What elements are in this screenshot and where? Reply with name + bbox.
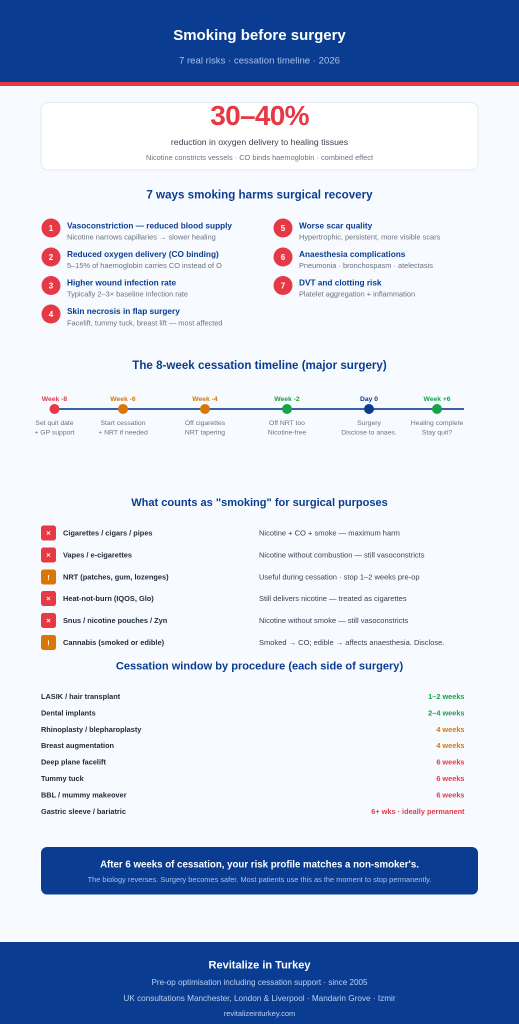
milestone week -2 (268, 396, 306, 436)
milestone week -8: Set quit date (35, 420, 74, 427)
row: BBL (41, 790, 464, 800)
row: LASIK: LASIK / hair transplant (41, 692, 121, 701)
row: cannabis: ! (47, 638, 50, 648)
stat card (41, 100, 478, 170)
row: NRT: Useful during cessation · stop 1–2 weeks pre-op (259, 572, 420, 582)
risk 2 (42, 248, 222, 270)
risk 4: Skin necrosis in flap surgery (67, 307, 180, 316)
row: snus: × (46, 616, 51, 625)
row: tummy tuck (41, 774, 464, 783)
risk 7 (274, 276, 415, 298)
milestone week -4: Off cigarettes (185, 420, 226, 427)
milestone day 0 (341, 396, 397, 436)
row: gastric: 6+ wks · ideally permanent (371, 807, 465, 816)
risk 6: 6 (281, 253, 286, 262)
heading: 7 ways: 7 ways smoking harms surgical recovery (146, 188, 373, 202)
milestone day 0: Day 0 (360, 396, 378, 403)
milestone week +6: Week +6 (423, 396, 451, 403)
milestone week -4: Week -4 (192, 396, 218, 403)
footer line 2: UK consultations Manchester, London & Liverpool · Mandarin Grove · Izmir (123, 994, 396, 1003)
row: heat-not-burn: × (46, 594, 51, 603)
risk 3: Higher wound infection rate (67, 278, 176, 288)
callout banner (41, 847, 478, 894)
timeline chart (34, 396, 464, 436)
milestone day 0: Surgery (357, 420, 381, 427)
risk 4 (42, 304, 223, 328)
row: rhinoplasty: Rhinoplasty / blepharoplasty (41, 725, 142, 734)
row: cannabis (41, 635, 444, 650)
stat note: Nicotine constricts vessels · CO binds haemoglobin · combined effect (146, 153, 373, 162)
heading: cessation window: Cessation window by procedure (each side of surgery) (116, 660, 403, 672)
risk 7: Platelet aggregation + inflammation (299, 290, 415, 298)
row: snus (41, 613, 408, 628)
risk 5 (274, 218, 441, 242)
risk 6: Pneumonia · bronchospasm · atelectasis (299, 261, 433, 270)
title: Smoking before surgery (173, 27, 346, 44)
risk 5: Hypertrophic, persistent, more visible scars (299, 232, 441, 242)
risk 7: 7 (281, 282, 286, 290)
milestone week +6: Stay quit? (422, 430, 452, 436)
milestone week -6: Week -6 (110, 396, 136, 403)
row: vapes: Vapes / e-cigarettes (63, 550, 132, 560)
risk 3 (42, 276, 188, 298)
row: facelift: Deep plane facelift (41, 758, 106, 766)
risk 7: DVT and clotting risk (299, 278, 382, 288)
footer (0, 942, 519, 1024)
risk 3: Typically 2–3× baseline infection rate (67, 290, 188, 298)
row: rhinoplasty (41, 725, 464, 734)
row: gastric (41, 807, 465, 816)
milestone week -6 (98, 396, 148, 436)
row: cigarettes: Nicotine + CO + smoke — maximum harm (259, 528, 400, 538)
milestone week -4 (185, 396, 226, 436)
risk 6 (274, 248, 433, 270)
row: NRT: ! (47, 573, 50, 582)
callout text: The biology reverses. Surgery becomes safer. Most patients use this as the moment to stop permanently. (88, 875, 431, 884)
row: LASIK: 1–2 weeks (428, 692, 464, 701)
row: snus: Nicotine without smoke — still vasoconstricts (259, 616, 408, 625)
row: heat-not-burn (41, 591, 407, 606)
row: dental: 2–4 weeks (428, 708, 464, 718)
heading: what counts: What counts as "smoking" for surgical purposes (131, 497, 388, 509)
milestone week -2: Week -2 (274, 396, 300, 403)
row: breast: 4 weeks (436, 741, 464, 750)
row: tummy tuck: Tummy tuck (41, 774, 85, 783)
stat description: reduction in oxygen delivery to healing tissues (171, 137, 349, 147)
footer brand: Revitalize in Turkey (209, 960, 311, 972)
row: NRT (41, 570, 420, 584)
row: NRT: NRT (patches, gum, lozenges) (63, 572, 169, 582)
milestone week -6: + NRT if needed (98, 430, 148, 436)
risk 4: Facelift, tummy tuck, breast lift — most affected (67, 318, 223, 328)
row: BBL: BBL / mummy makeover (41, 790, 127, 800)
risk 6: Anaesthesia complications (299, 250, 406, 259)
risk 3: 3 (49, 282, 54, 290)
row: heat-not-burn: Still delivers nicotine — treated as cigarettes (259, 594, 407, 603)
row: BBL: 6 weeks (436, 790, 464, 800)
row: breast (41, 741, 464, 750)
row: facelift: 6 weeks (436, 758, 464, 766)
row: cannabis: Smoked → CO; edible → affects anaesthesia. Disclose. (259, 638, 444, 647)
row: cannabis: Cannabis (smoked or edible) (63, 638, 165, 647)
milestone week +6 (411, 396, 463, 436)
milestone week -4: NRT tapering (185, 430, 225, 436)
milestone week -2: Off NRT too (269, 420, 305, 427)
smoking products table (41, 526, 444, 650)
row: tummy tuck: 6 weeks (436, 774, 464, 783)
row: cigarettes: Cigarettes / cigars / pipes (63, 528, 153, 538)
risk 1: 1 (49, 224, 54, 233)
footer url: revitalizeinturkey.com (224, 1009, 295, 1018)
row: heat-not-burn: Heat-not-burn (IQOS, Glo) (63, 594, 154, 603)
risk 4: 4 (49, 310, 54, 319)
risk 2: Reduced oxygen delivery (CO binding) (67, 250, 219, 259)
milestone day 0: Disclose to anaes. (341, 430, 397, 436)
risk 1 (42, 218, 232, 242)
row: snus: Snus / nicotine pouches / Zyn (63, 616, 168, 625)
risk 2: 5–15% of haemoglobin carries CO instead of O (67, 261, 222, 270)
row: vapes: × (46, 550, 51, 560)
risk list (42, 218, 441, 328)
row: dental (41, 708, 464, 718)
milestone week -6: Start cessation (101, 420, 146, 427)
row: dental: Dental implants (41, 708, 96, 718)
header banner (0, 0, 519, 86)
row: breast: Breast augmentation (41, 741, 115, 750)
heading: timeline: The 8-week cessation timeline (major surgery) (132, 359, 387, 372)
milestone week -2: Nicotine-free (268, 430, 306, 436)
milestone week -8: + GP support (34, 430, 75, 436)
risk 1: Vasoconstriction — reduced blood supply (67, 222, 232, 230)
risk 5: Worse scar quality (299, 222, 373, 230)
subtitle: 7 real risks · cessation timeline · 2026 (179, 56, 340, 66)
milestone week +6: Healing complete (411, 420, 463, 427)
row: LASIK (41, 692, 464, 701)
row: vapes: Nicotine without combustion — still vasoconstricts (259, 550, 425, 560)
row: vapes (41, 548, 425, 562)
milestone week -8: Week -8 (42, 396, 67, 403)
row: gastric: Gastric sleeve / bariatric (41, 807, 126, 816)
footer line 1: Pre-op optimisation including cessation support · since 2005 (152, 978, 368, 987)
row: rhinoplasty: 4 weeks (436, 725, 464, 734)
procedure table (41, 692, 465, 816)
row: cigarettes (41, 526, 400, 540)
risk 1: Nicotine narrows capillaries → slower healing (67, 232, 216, 242)
callout heading: After 6 weeks of cessation, your risk profile matches a non-smoker's. (100, 860, 419, 870)
row: facelift (41, 758, 464, 766)
row: cigarettes: × (46, 528, 51, 538)
big statistic: 30–40% (210, 100, 310, 131)
risk 5: 5 (281, 224, 286, 233)
risk 2: 2 (49, 253, 54, 262)
milestone week -8 (34, 396, 75, 436)
